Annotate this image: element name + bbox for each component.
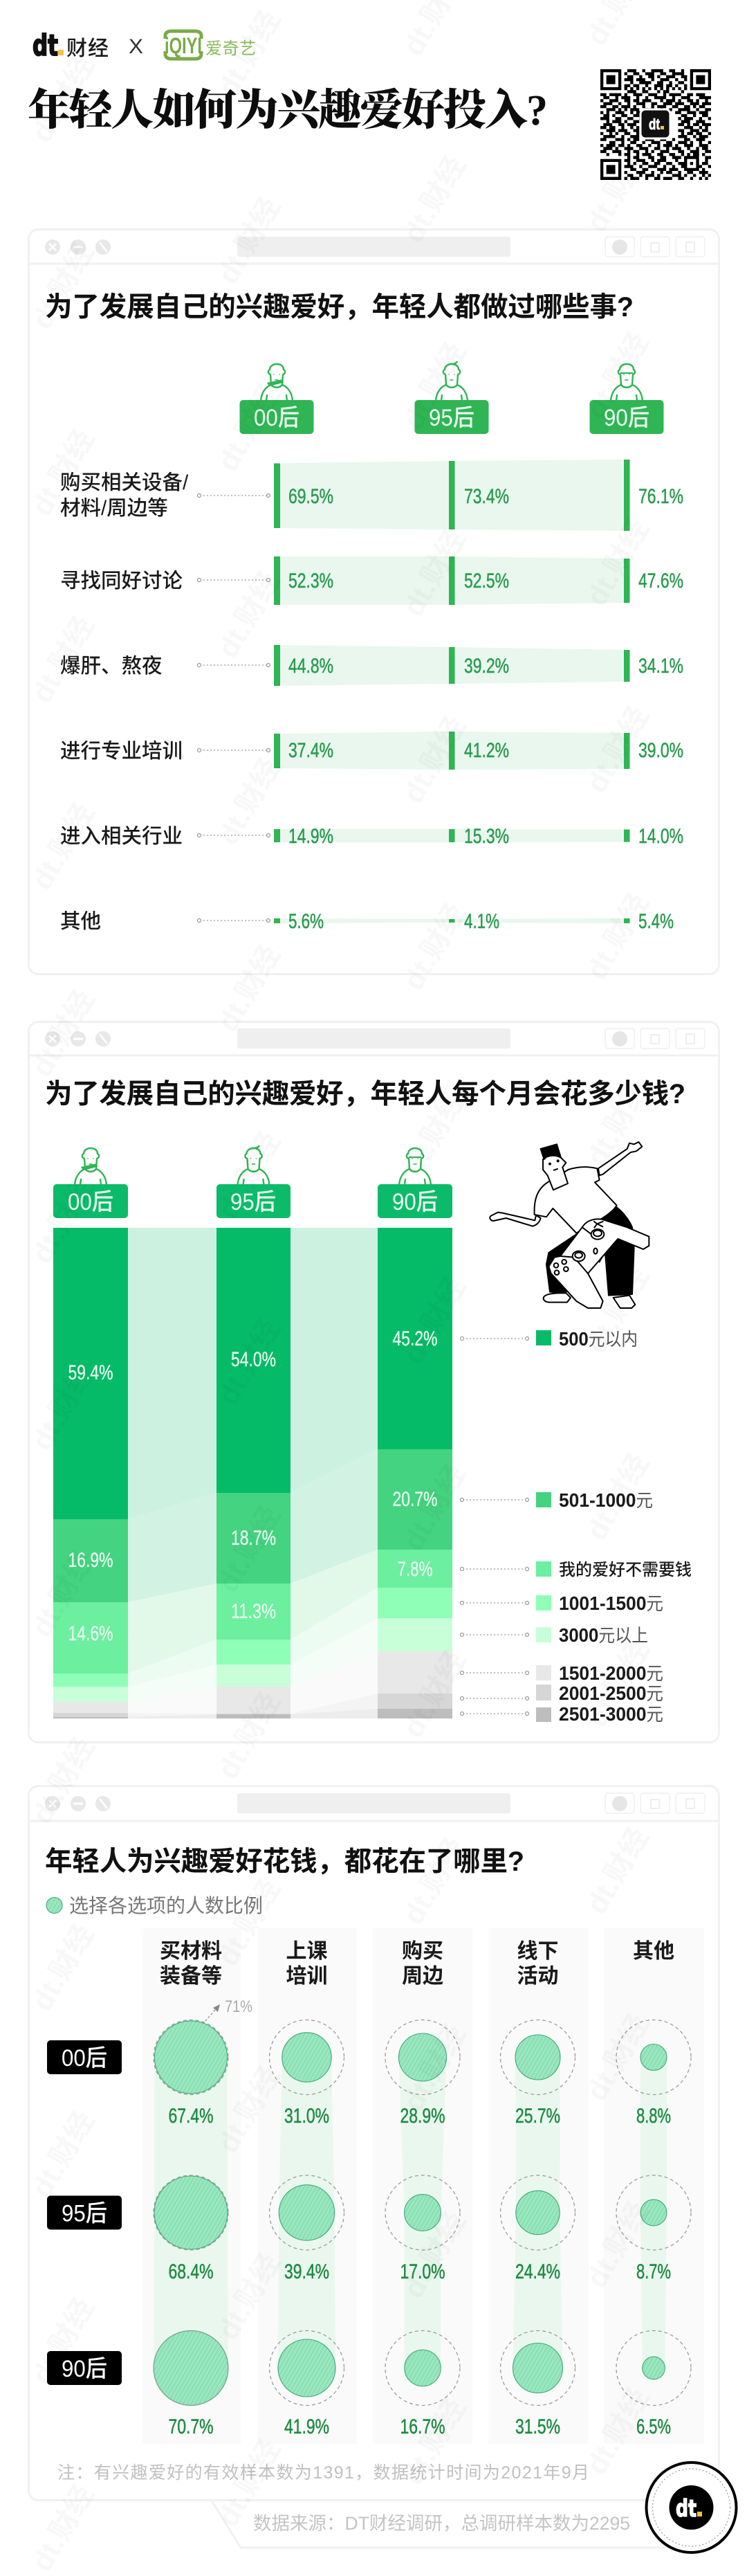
column: 线下活动: 24.4% bbox=[515, 2260, 560, 2283]
column: 90后: 7.8% bbox=[397, 1558, 433, 1581]
watermark pattern: dt.财经 bbox=[211, 752, 286, 850]
row: 进入相关行业: 15.3% bbox=[464, 825, 509, 848]
generation header: 90后 bbox=[589, 364, 664, 434]
watermark pattern: dt.财经 bbox=[211, 1687, 286, 1784]
watermark pattern: dt.财经 bbox=[25, 1919, 100, 2016]
watermark pattern: dt.财经 bbox=[580, 514, 655, 611]
logo: iQIYI: 爱奇艺 bbox=[205, 39, 256, 58]
column: 买材料装备等 bbox=[154, 1940, 228, 2438]
watermark pattern: dt.财经 bbox=[580, 1074, 655, 1172]
column: 买材料装备等: 68.4% bbox=[169, 2260, 213, 2283]
watermark pattern: dt.财经 bbox=[396, 337, 472, 435]
watermark pattern: dt.财经 bbox=[211, 5, 286, 102]
column: 购买周边 bbox=[385, 1940, 460, 2438]
row: 进行专业培训: 37.4% bbox=[288, 739, 333, 762]
watermark pattern: dt.财经 bbox=[25, 2105, 100, 2203]
logo: dt财经 bbox=[33, 28, 109, 62]
watermark pattern: dt.财经 bbox=[580, 1448, 655, 1545]
panel heading: 为了发展自己的兴趣爱好，年轻人都做过哪些事? bbox=[45, 292, 634, 323]
column: 95后: 18.7% bbox=[231, 1527, 276, 1550]
QR centre logo: dt bbox=[649, 116, 661, 133]
logo: iQIYI: iQIYI bbox=[165, 33, 202, 58]
row: 购买相关设备: 73.4% bbox=[464, 485, 509, 508]
column: 上课培训: 培训 bbox=[286, 1965, 328, 1988]
panel heading: 为了发展自己的兴趣爱好，年轻人每个月会花多少钱? bbox=[45, 1079, 685, 1109]
watermark pattern: dt.财经 bbox=[396, 711, 472, 808]
column: 95后: 54.0% bbox=[231, 1348, 276, 1371]
row: 购买相关设备: 购买相关设备/ bbox=[60, 471, 189, 494]
generation header: 00后 bbox=[239, 364, 314, 434]
legend item: 3000元以上 bbox=[461, 1624, 648, 1646]
row: 寻找同好讨论: 寻找同好讨论 bbox=[60, 570, 183, 592]
legend item: 3000元以上: 3000元以上 bbox=[559, 1624, 648, 1646]
row: 爆肝、熬夜: 44.8% bbox=[288, 655, 333, 678]
window chrome bbox=[29, 230, 719, 974]
flow bands 95后 to 90后 bbox=[290, 1228, 378, 1718]
watermark pattern: dt.财经 bbox=[396, 1645, 472, 1743]
column: 上课培训: 39.4% bbox=[284, 2260, 329, 2283]
watermark pattern: dt.财经 bbox=[25, 1545, 100, 1642]
column: 95后 bbox=[216, 1228, 290, 1718]
legend item: 1001-1500元 bbox=[461, 1593, 663, 1614]
row tag: 95后: 95后 bbox=[62, 2201, 107, 2227]
column: 线下活动: 31.5% bbox=[515, 2415, 560, 2438]
column: 买材料装备等: 买材料 bbox=[160, 1940, 222, 1963]
column: 线下活动 bbox=[501, 1940, 575, 2438]
watermark pattern: dt.财经 bbox=[580, 700, 655, 798]
watermark pattern: dt.财经 bbox=[25, 797, 100, 895]
watermark pattern: dt.财经 bbox=[396, 150, 472, 248]
watermark pattern: dt.财经 bbox=[25, 1171, 100, 1269]
watermark pattern: dt.财经 bbox=[580, 2382, 655, 2480]
watermark pattern: dt.财经 bbox=[25, 237, 100, 334]
generation header: 90后: 90后 bbox=[604, 405, 649, 431]
watermark pattern: dt.财经 bbox=[396, 524, 472, 622]
legend item: 500元以内: 500元以内 bbox=[559, 1328, 638, 1350]
column: 线下活动: 25.7% bbox=[515, 2105, 560, 2128]
row: 进行专业培训: 39.0% bbox=[638, 739, 683, 762]
watermark pattern: dt.财经 bbox=[211, 939, 286, 1037]
row: 爆肝、熬夜 bbox=[60, 645, 683, 686]
watermark pattern: dt.财经 bbox=[396, 1271, 472, 1369]
QR code bbox=[600, 71, 711, 179]
column: 其他: 6.5% bbox=[636, 2415, 671, 2438]
row tag: 00后: 00后 bbox=[62, 2045, 107, 2071]
panel: where the money goes bbox=[29, 1786, 719, 2548]
column: 上课培训: 41.9% bbox=[284, 2415, 329, 2438]
row tag: 95后 bbox=[47, 2195, 122, 2230]
legend item: 500元以内 bbox=[461, 1328, 638, 1350]
row: 进入相关行业: 14.9% bbox=[288, 825, 333, 848]
legend item: 2501-3000元 bbox=[461, 1703, 663, 1725]
row: 爆肝、熬夜: 爆肝、熬夜 bbox=[60, 655, 163, 678]
generation header: 95后 bbox=[415, 361, 488, 434]
watermark pattern: dt.财经 bbox=[396, 898, 472, 995]
column: 上课培训 bbox=[270, 1940, 344, 2438]
legend item: 501-1000元: 501-1000元 bbox=[559, 1489, 653, 1511]
row: 其他: 其他 bbox=[60, 910, 101, 933]
logo: dt财经: dt bbox=[33, 28, 58, 62]
QR centre logo bbox=[640, 109, 670, 138]
row tag: 00后 bbox=[47, 2040, 122, 2074]
watermark pattern: dt.财经 bbox=[396, 1458, 472, 1556]
header logos bbox=[33, 28, 256, 62]
watermark pattern: dt.财经 bbox=[580, 1635, 655, 1732]
watermark pattern: dt.财经 bbox=[211, 2060, 286, 2158]
data source: 数据来源：DT财经调研，总调研样本数为2295 bbox=[253, 2513, 630, 2534]
panel heading: 年轻人为兴趣爱好花钱，都花在了哪里? bbox=[45, 1847, 524, 1877]
legend: spending brackets bbox=[461, 1328, 692, 1725]
badge: dt logo: dt bbox=[676, 2495, 697, 2523]
row tag: 90后: 90后 bbox=[62, 2356, 107, 2382]
watermark pattern: dt.财经 bbox=[25, 50, 100, 147]
watermark pattern: dt.财经 bbox=[396, 1832, 472, 1930]
row: 其他 bbox=[60, 910, 674, 933]
column: 上课培训: 上课 bbox=[286, 1940, 328, 1963]
watermark pattern: dt.财经 bbox=[396, 2393, 472, 2490]
legend item: 501-1000元 bbox=[461, 1489, 653, 1511]
row: 进入相关行业: 14.0% bbox=[638, 825, 683, 848]
annotation: 71% reference circle: 71% bbox=[225, 1997, 252, 2016]
row: 其他: 5.6% bbox=[288, 910, 324, 933]
column: 95后: 11.3% bbox=[231, 1600, 276, 1623]
watermark pattern: dt.财经 bbox=[396, 2206, 472, 2303]
legend item: 2001-2500元 bbox=[461, 1682, 663, 1704]
watermark pattern: dt.财经 bbox=[25, 1358, 100, 1455]
column: 购买周边: 16.7% bbox=[400, 2415, 445, 2438]
column: 其他: 8.8% bbox=[636, 2105, 671, 2128]
column: 00后: 14.6% bbox=[68, 1622, 113, 1645]
watermark pattern: dt.财经 bbox=[25, 2292, 100, 2390]
legend item: 我的爱好不需要钱 bbox=[461, 1561, 692, 1579]
row: 进入相关行业 bbox=[60, 825, 683, 848]
column: 00后 bbox=[53, 1228, 128, 1718]
column: 购买周边: 28.9% bbox=[400, 2105, 445, 2128]
column: 线下活动: 活动 bbox=[517, 1965, 559, 1988]
row: 其他: 5.4% bbox=[638, 910, 674, 933]
title: 年轻人如何为兴趣爱好投入? bbox=[28, 87, 548, 134]
generation header: 95后: 95后 bbox=[230, 1189, 276, 1215]
column: 90后: 45.2% bbox=[393, 1327, 437, 1350]
column: 购买周边: 周边 bbox=[402, 1965, 443, 1988]
generation header: 90后: 90后 bbox=[392, 1189, 438, 1215]
watermark pattern: dt.财经 bbox=[25, 1732, 100, 1829]
watermark pattern: dt.财经 bbox=[211, 1313, 286, 1411]
column: 其他: 其他 bbox=[633, 1940, 674, 1963]
watermark pattern: dt.财经 bbox=[580, 2195, 655, 2293]
generation header: 00后: 00后 bbox=[254, 405, 299, 431]
row tag: 90后 bbox=[47, 2351, 122, 2385]
legend item: 我的爱好不需要钱: 我的爱好不需要钱 bbox=[559, 1561, 692, 1579]
watermark pattern: dt.财经 bbox=[580, 887, 655, 985]
generation header: 95后 bbox=[216, 1145, 290, 1218]
window chrome bbox=[29, 1022, 719, 1743]
watermark pattern: dt.财经 bbox=[211, 379, 286, 476]
footer tail behind panel bbox=[212, 2501, 671, 2548]
column: 00后: 16.9% bbox=[68, 1549, 113, 1572]
row: 寻找同好讨论: 52.5% bbox=[464, 570, 509, 592]
logo: dt财经: 财经 bbox=[66, 37, 109, 60]
watermark pattern: dt.财经 bbox=[580, 1822, 655, 1919]
watermark pattern: dt.财经 bbox=[580, 140, 655, 237]
watermark pattern: dt.财经 bbox=[396, 1085, 472, 1182]
legend item: 1501-2000元: 1501-2000元 bbox=[559, 1662, 663, 1684]
badge: dt logo bbox=[646, 2462, 736, 2552]
watermark pattern: dt.财经 bbox=[211, 1126, 286, 1224]
row: 购买相关设备: 69.5% bbox=[288, 485, 333, 508]
legend: share of respondents: 选择各选项的人数比例 bbox=[69, 1895, 263, 1916]
column: 买材料装备等: 装备等 bbox=[160, 1965, 222, 1988]
panel: monthly spending bbox=[29, 1022, 719, 1743]
column: 上课培训: 31.0% bbox=[284, 2105, 329, 2128]
legend item: 1501-2000元 bbox=[461, 1662, 663, 1684]
generation header: 00后 bbox=[53, 1148, 128, 1218]
row: 进行专业培训: 进行专业培训 bbox=[60, 740, 183, 763]
watermark pattern: dt.财经 bbox=[580, 327, 655, 424]
row: 进行专业培训: 41.2% bbox=[464, 739, 509, 762]
annotation: 71% reference circle bbox=[205, 1997, 252, 2021]
row: 爆肝、熬夜: 39.2% bbox=[464, 655, 509, 678]
column backgrounds bbox=[142, 1928, 704, 2444]
watermark pattern: dt.财经 bbox=[25, 984, 100, 1082]
column: 00后: 59.4% bbox=[68, 1361, 113, 1384]
watermark pattern: dt.财经 bbox=[211, 2434, 286, 2532]
column: 其他 bbox=[616, 1940, 691, 2438]
logo: iQIYI bbox=[165, 31, 256, 59]
generation header: 95后: 95后 bbox=[429, 405, 474, 431]
column: 线下活动: 线下 bbox=[517, 1940, 559, 1963]
watermark pattern: dt.财经 bbox=[211, 192, 286, 289]
watermark pattern: dt.财经 bbox=[580, 1261, 655, 1359]
row: 寻找同好讨论 bbox=[60, 556, 683, 605]
row: 爆肝、熬夜: 34.1% bbox=[638, 655, 683, 678]
illustration: man with game controller bbox=[490, 1142, 649, 1308]
column: 90后 bbox=[378, 1228, 452, 1718]
flow bands 00后 to 95后 bbox=[128, 1228, 216, 1718]
legend item: 2001-2500元: 2001-2500元 bbox=[559, 1682, 663, 1704]
watermark pattern: dt.财经 bbox=[25, 2479, 100, 2576]
row: 进行专业培训 bbox=[60, 732, 683, 770]
column: 买材料装备等: 70.7% bbox=[169, 2415, 213, 2438]
row: 寻找同好讨论: 47.6% bbox=[638, 570, 683, 592]
panel: what young people have done bbox=[29, 230, 719, 974]
row: 购买相关设备: 材料/周边等 bbox=[60, 497, 168, 520]
generation header: 90后 bbox=[378, 1148, 452, 1218]
stacked bar chart: monthly spending bbox=[53, 1228, 452, 1718]
window chrome bbox=[29, 1786, 719, 2500]
watermark pattern: dt.财经 bbox=[580, 2008, 655, 2106]
watermark pattern: dt.财经 bbox=[25, 610, 100, 708]
generation header: 00后: 00后 bbox=[68, 1189, 113, 1215]
row: 购买相关设备: 76.1% bbox=[638, 485, 683, 508]
row: 寻找同好讨论: 52.3% bbox=[288, 570, 333, 592]
watermark pattern: dt.财经 bbox=[211, 2247, 286, 2345]
row: 其他: 4.1% bbox=[464, 910, 499, 933]
row: 购买相关设备 bbox=[60, 460, 683, 531]
watermark pattern: dt.财经 bbox=[25, 424, 100, 521]
watermark pattern: dt.财经 bbox=[211, 565, 286, 663]
column: 买材料装备等: 67.4% bbox=[169, 2105, 213, 2128]
legend item: 2501-3000元: 2501-3000元 bbox=[559, 1703, 663, 1725]
collaboration cross: X bbox=[129, 35, 143, 58]
note: 注：有兴趣爱好的有效样本数为1391，数据统计时间为2021年9月 bbox=[57, 2463, 589, 2483]
watermark pattern: dt.财经 bbox=[396, 2019, 472, 2116]
column: 90后: 20.7% bbox=[393, 1488, 437, 1511]
column: 购买周边: 购买 bbox=[402, 1940, 443, 1963]
legend item: 1001-1500元: 1001-1500元 bbox=[559, 1593, 663, 1614]
row: 进入相关行业: 进入相关行业 bbox=[60, 825, 183, 848]
column: 购买周边: 17.0% bbox=[400, 2260, 445, 2283]
watermark pattern: dt.财经 bbox=[211, 1874, 286, 1971]
watermark pattern: dt.财经 bbox=[211, 1500, 286, 1597]
column: 其他: 8.7% bbox=[636, 2260, 671, 2283]
